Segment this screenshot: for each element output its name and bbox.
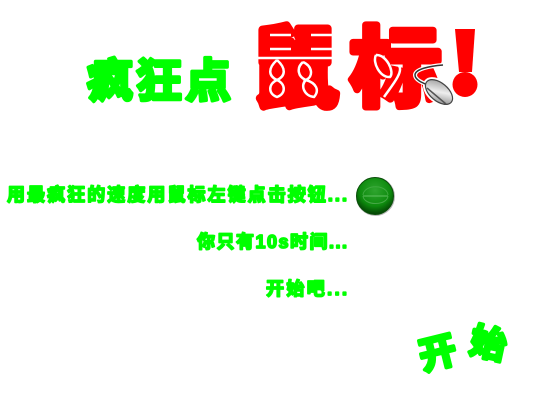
title character: shu: 鼠 <box>251 21 338 118</box>
instruction line 3: 开始吧... <box>266 279 347 299</box>
instruction line 1: 用最疯狂的速度用鼠标左键点击按钮... <box>7 184 347 205</box>
title character: biao: 标 <box>350 20 441 118</box>
icon: green button <box>356 177 395 216</box>
start button text <box>415 320 510 378</box>
start character: kai: 开 <box>415 329 461 378</box>
title: mouse <box>250 20 441 118</box>
title: crazy click: 疯狂点 <box>87 55 234 107</box>
exclamation mark <box>452 29 478 97</box>
start character: shi: 始 <box>466 320 510 367</box>
icon: computer mouse <box>415 65 457 109</box>
instruction line 2: 你只有10s时间... <box>197 232 347 252</box>
